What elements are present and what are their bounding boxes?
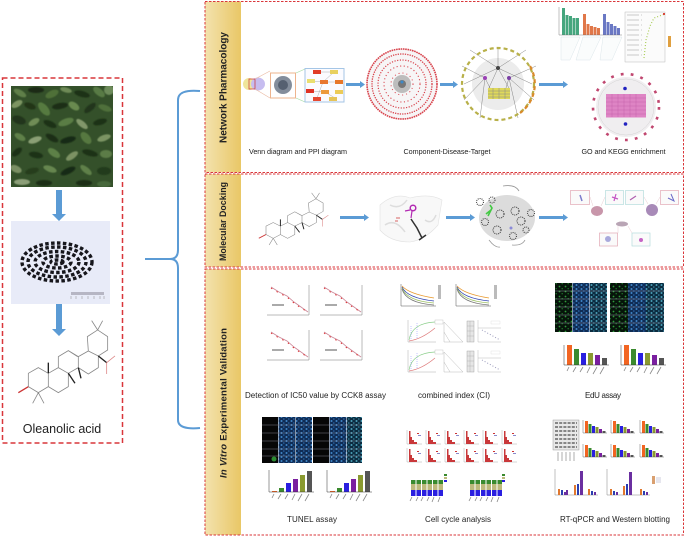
heading: Network Pharmacology: Network Pharmacology [218, 32, 230, 143]
chart: EdU bars D [621, 345, 666, 374]
chart group: cell cycle stacked bars [410, 474, 505, 502]
chart group: protein bars [583, 420, 664, 457]
caption: Component-Disease-Target: Component-Disease-Target [404, 147, 490, 156]
arrow: ring network to target network [440, 81, 458, 88]
arrow: target network to enrichment [539, 81, 568, 88]
diagram: Venn and PPI [243, 68, 344, 102]
arrow: plant to fruit [52, 190, 66, 221]
chart group: RT-qPCR [555, 469, 661, 495]
arrow: PPI to ring network [346, 81, 365, 88]
chart group: combined index [401, 284, 501, 372]
image: western blot [553, 420, 579, 461]
chemical structure: oleanolic acid [18, 321, 115, 403]
heading: Molecular Docking: Molecular Docking [218, 182, 228, 261]
heading: In Vitro Experimental Validation: In Vitro Experimental Validation [218, 328, 230, 478]
chart: EdU bars C [564, 345, 609, 374]
image group: EdU fluorescence [555, 283, 664, 332]
diagram: binding site close-up [380, 196, 442, 242]
chart: TUNEL bars D [327, 470, 372, 501]
chart: TUNEL bars C [269, 470, 314, 501]
caption: TUNEL assay: TUNEL assay [287, 515, 337, 524]
image: plant photograph [9, 85, 114, 187]
arrow: binding site to protein [446, 214, 475, 221]
arrow: protein to docking results [539, 214, 568, 221]
chart group: IC50 curves [267, 285, 362, 360]
chart: GO enrichment bars [559, 7, 622, 60]
panel: in vitro experimental validation [205, 269, 684, 535]
caption: RT-qPCR and Western blotting: RT-qPCR and Western blotting [560, 515, 670, 524]
label: Oleanolic acid: Oleanolic acid [23, 422, 101, 436]
caption: combined index: combined index (CI) [418, 391, 490, 400]
image: dried fruits on ruler background [11, 221, 110, 304]
arrow: fruit to compound [52, 304, 66, 336]
chart: KEGG dot plot [625, 12, 671, 62]
image group: TUNEL fluorescence [262, 417, 362, 463]
chemical structure: ligand [259, 193, 328, 245]
panel: oleanolic acid source [2, 78, 122, 443]
caption: Cell cycle analysis: Cell cycle analysis [425, 515, 491, 524]
diagram: protein ribbon structure [476, 186, 535, 247]
diagram: docking result panels [570, 190, 678, 246]
panel: network pharmacology [205, 2, 684, 172]
diagram: component-disease-target ring network [367, 49, 437, 119]
caption: Venn diagram and PPI diagram: Venn diagram and PPI diagram [249, 147, 347, 156]
caption: EdU assay: EdU assay [585, 391, 621, 400]
arrow: ligand to binding site [340, 214, 369, 221]
diagram: enrichment network [593, 74, 659, 140]
chart group: cell cycle histograms [407, 430, 517, 462]
caption: GO and KEGG enrichment: GO and KEGG enrichment [582, 147, 666, 156]
diagram: target network with yellow grid [462, 47, 536, 120]
panel: molecular docking [205, 174, 684, 267]
caption: IC50: Detection of IC50 value by CCK8 assay [245, 391, 386, 400]
brace connector [145, 91, 200, 428]
